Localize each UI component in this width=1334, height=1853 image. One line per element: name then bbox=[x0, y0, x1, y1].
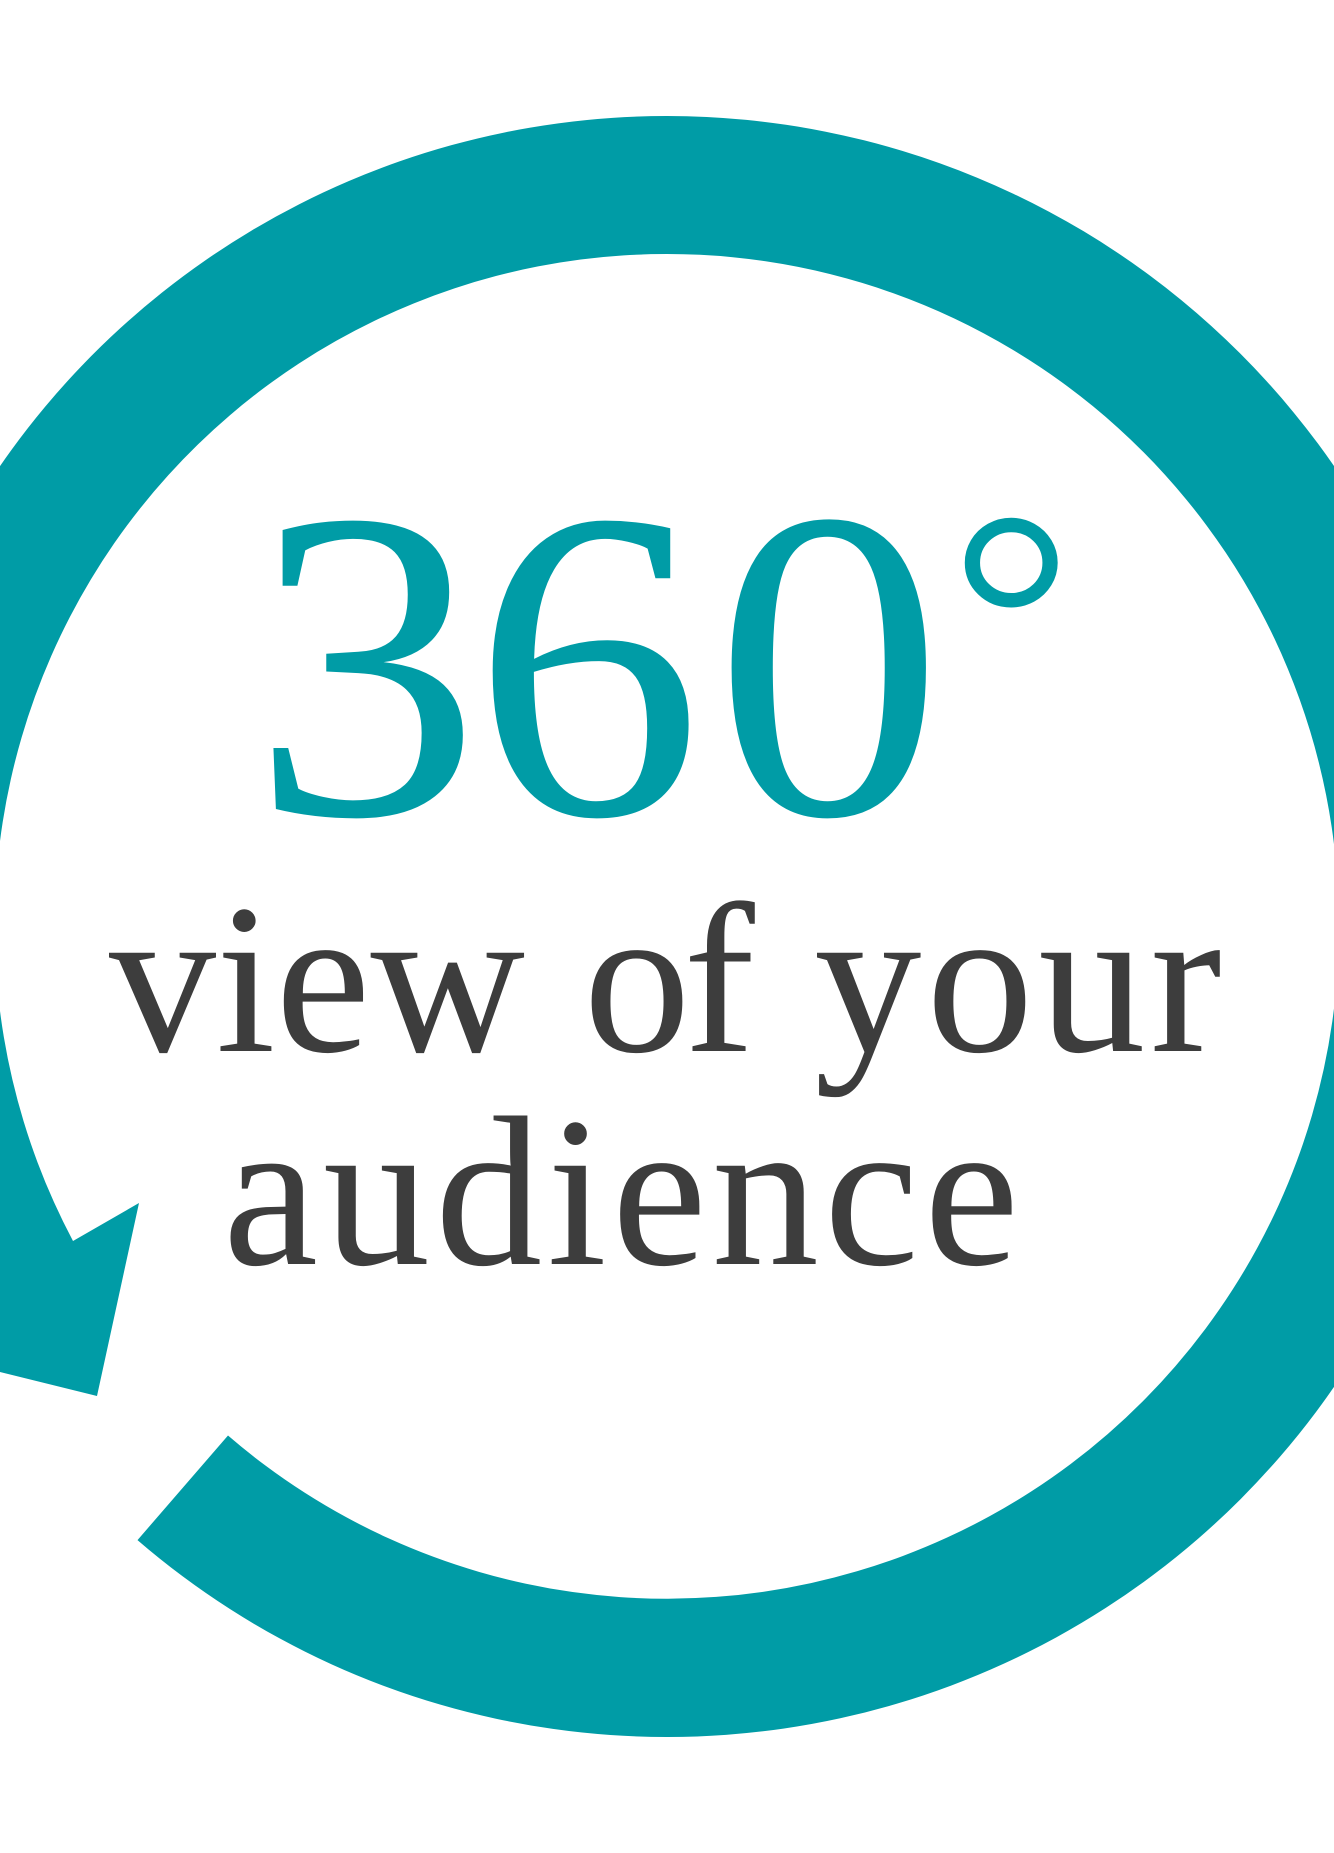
heading: 360 degrees: 0 bbox=[714, 419, 943, 910]
text: view of your: of bbox=[584, 861, 794, 1098]
text: view of your: your bbox=[814, 861, 1227, 1098]
heading: 360 degrees: ° bbox=[950, 452, 1073, 779]
heading: 360 degrees: 3 bbox=[252, 419, 481, 910]
text: view of your: view bbox=[109, 861, 578, 1098]
heading: 360 degrees: 6 bbox=[473, 419, 702, 910]
text: audience: audience bbox=[223, 1074, 1019, 1311]
